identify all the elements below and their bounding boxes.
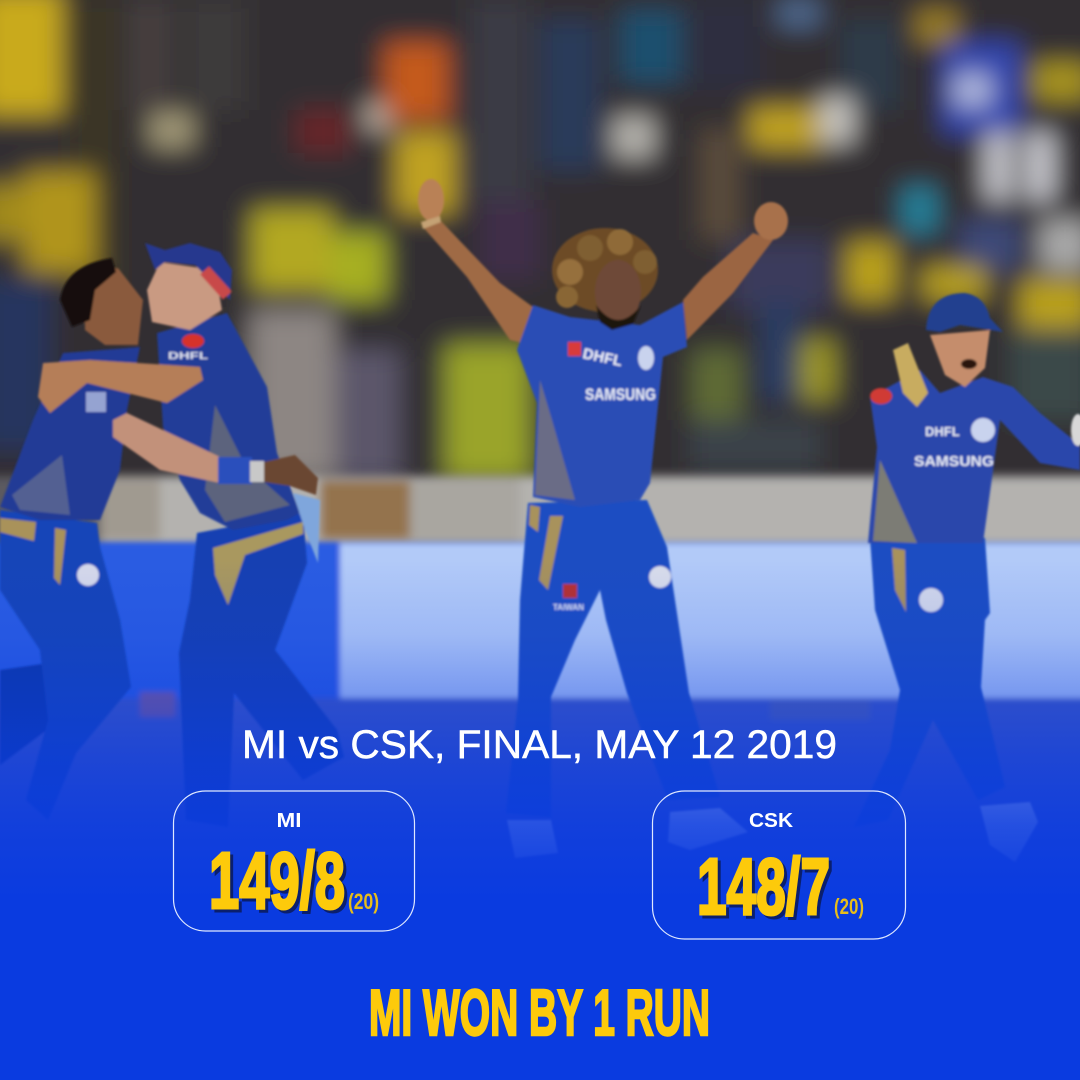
face (930, 330, 990, 387)
left player shirt (0, 347, 140, 520)
mesh side panel (873, 460, 917, 543)
shirt sponsor badge (568, 342, 581, 356)
shirt sponsor DHFL: DHFL (581, 345, 624, 370)
ball hand (1071, 414, 1080, 446)
shirt sponsor SAMSUNG: SAMSUNG (914, 453, 994, 470)
legs (506, 500, 720, 817)
result headline: MI WON BY 1 RUN (369, 976, 710, 1049)
shoe (980, 802, 1038, 862)
left arm (423, 220, 533, 343)
wrist band (421, 216, 441, 229)
pants trim (892, 548, 906, 612)
hair (552, 228, 658, 312)
shoulder logo (870, 388, 892, 404)
sponsor: TAIWAN (553, 603, 584, 612)
score: 149/8: 149/8 (209, 836, 345, 925)
score shadow: 149/8 (212, 839, 348, 928)
wrist band (218, 457, 252, 484)
panel: MI score (174, 791, 414, 931)
left player face (84, 268, 143, 345)
sponsor icon (563, 584, 577, 598)
shirt sponsor: DHFL (168, 351, 208, 362)
second player face (147, 262, 222, 330)
face (595, 260, 641, 324)
pants badge (919, 588, 943, 612)
player: centre bowler (418, 179, 788, 858)
shirt (868, 370, 1080, 543)
cap badge (200, 266, 232, 300)
beard (596, 305, 641, 330)
left waist trim (0, 518, 66, 585)
overs: 20: (20) (348, 889, 379, 914)
second player legs (179, 513, 344, 827)
shirt sponsor DHFL: DHFL (925, 424, 960, 439)
left player rear leg (0, 660, 70, 765)
shoes (507, 808, 748, 858)
second player cap (145, 243, 232, 300)
blue gradient overlay (0, 560, 1080, 900)
mesh side panel (535, 380, 575, 500)
label: MI: MI (276, 810, 302, 832)
left player hair (60, 258, 116, 327)
pants badge (77, 564, 99, 586)
left player shoulder logo (86, 392, 106, 412)
background: advertising board and ground (0, 543, 1080, 1080)
left fist (418, 179, 444, 221)
player: left pair celebrating (0, 243, 344, 827)
watch (250, 461, 264, 482)
top arm (38, 360, 203, 413)
glove (893, 343, 928, 407)
second player shirt (157, 313, 300, 530)
waist trim (213, 522, 303, 605)
pants badge (649, 566, 671, 588)
pants trim (529, 505, 563, 590)
title: MI vs CSK, FINAL, MAY 12 2019 (242, 723, 837, 767)
hand (264, 455, 318, 495)
background: stadium barrier (0, 476, 1080, 546)
legs (854, 538, 1005, 827)
score shadow: 148/7 (700, 845, 833, 934)
shirt logo (182, 334, 204, 348)
towel (293, 493, 320, 563)
cap (926, 293, 1003, 332)
shirt (517, 302, 687, 507)
team crest (971, 418, 995, 442)
score: 148/7: 148/7 (697, 842, 830, 931)
mouth (961, 359, 977, 369)
lower arm (113, 413, 220, 483)
second player mesh panel (205, 405, 290, 522)
shirt sponsor SAMSUNG: SAMSUNG (585, 385, 656, 404)
left player mesh panel (12, 455, 70, 515)
overs: 20: (20) (834, 894, 864, 919)
label: CSK: CSK (749, 810, 794, 832)
left player legs (0, 510, 131, 820)
right fist (754, 202, 788, 240)
right arm (683, 233, 773, 340)
background: blurred stadium crowd (0, 0, 1080, 500)
team crest (638, 346, 654, 370)
panel: CSK score (652, 791, 906, 939)
player: right wicket keeper (854, 293, 1080, 862)
